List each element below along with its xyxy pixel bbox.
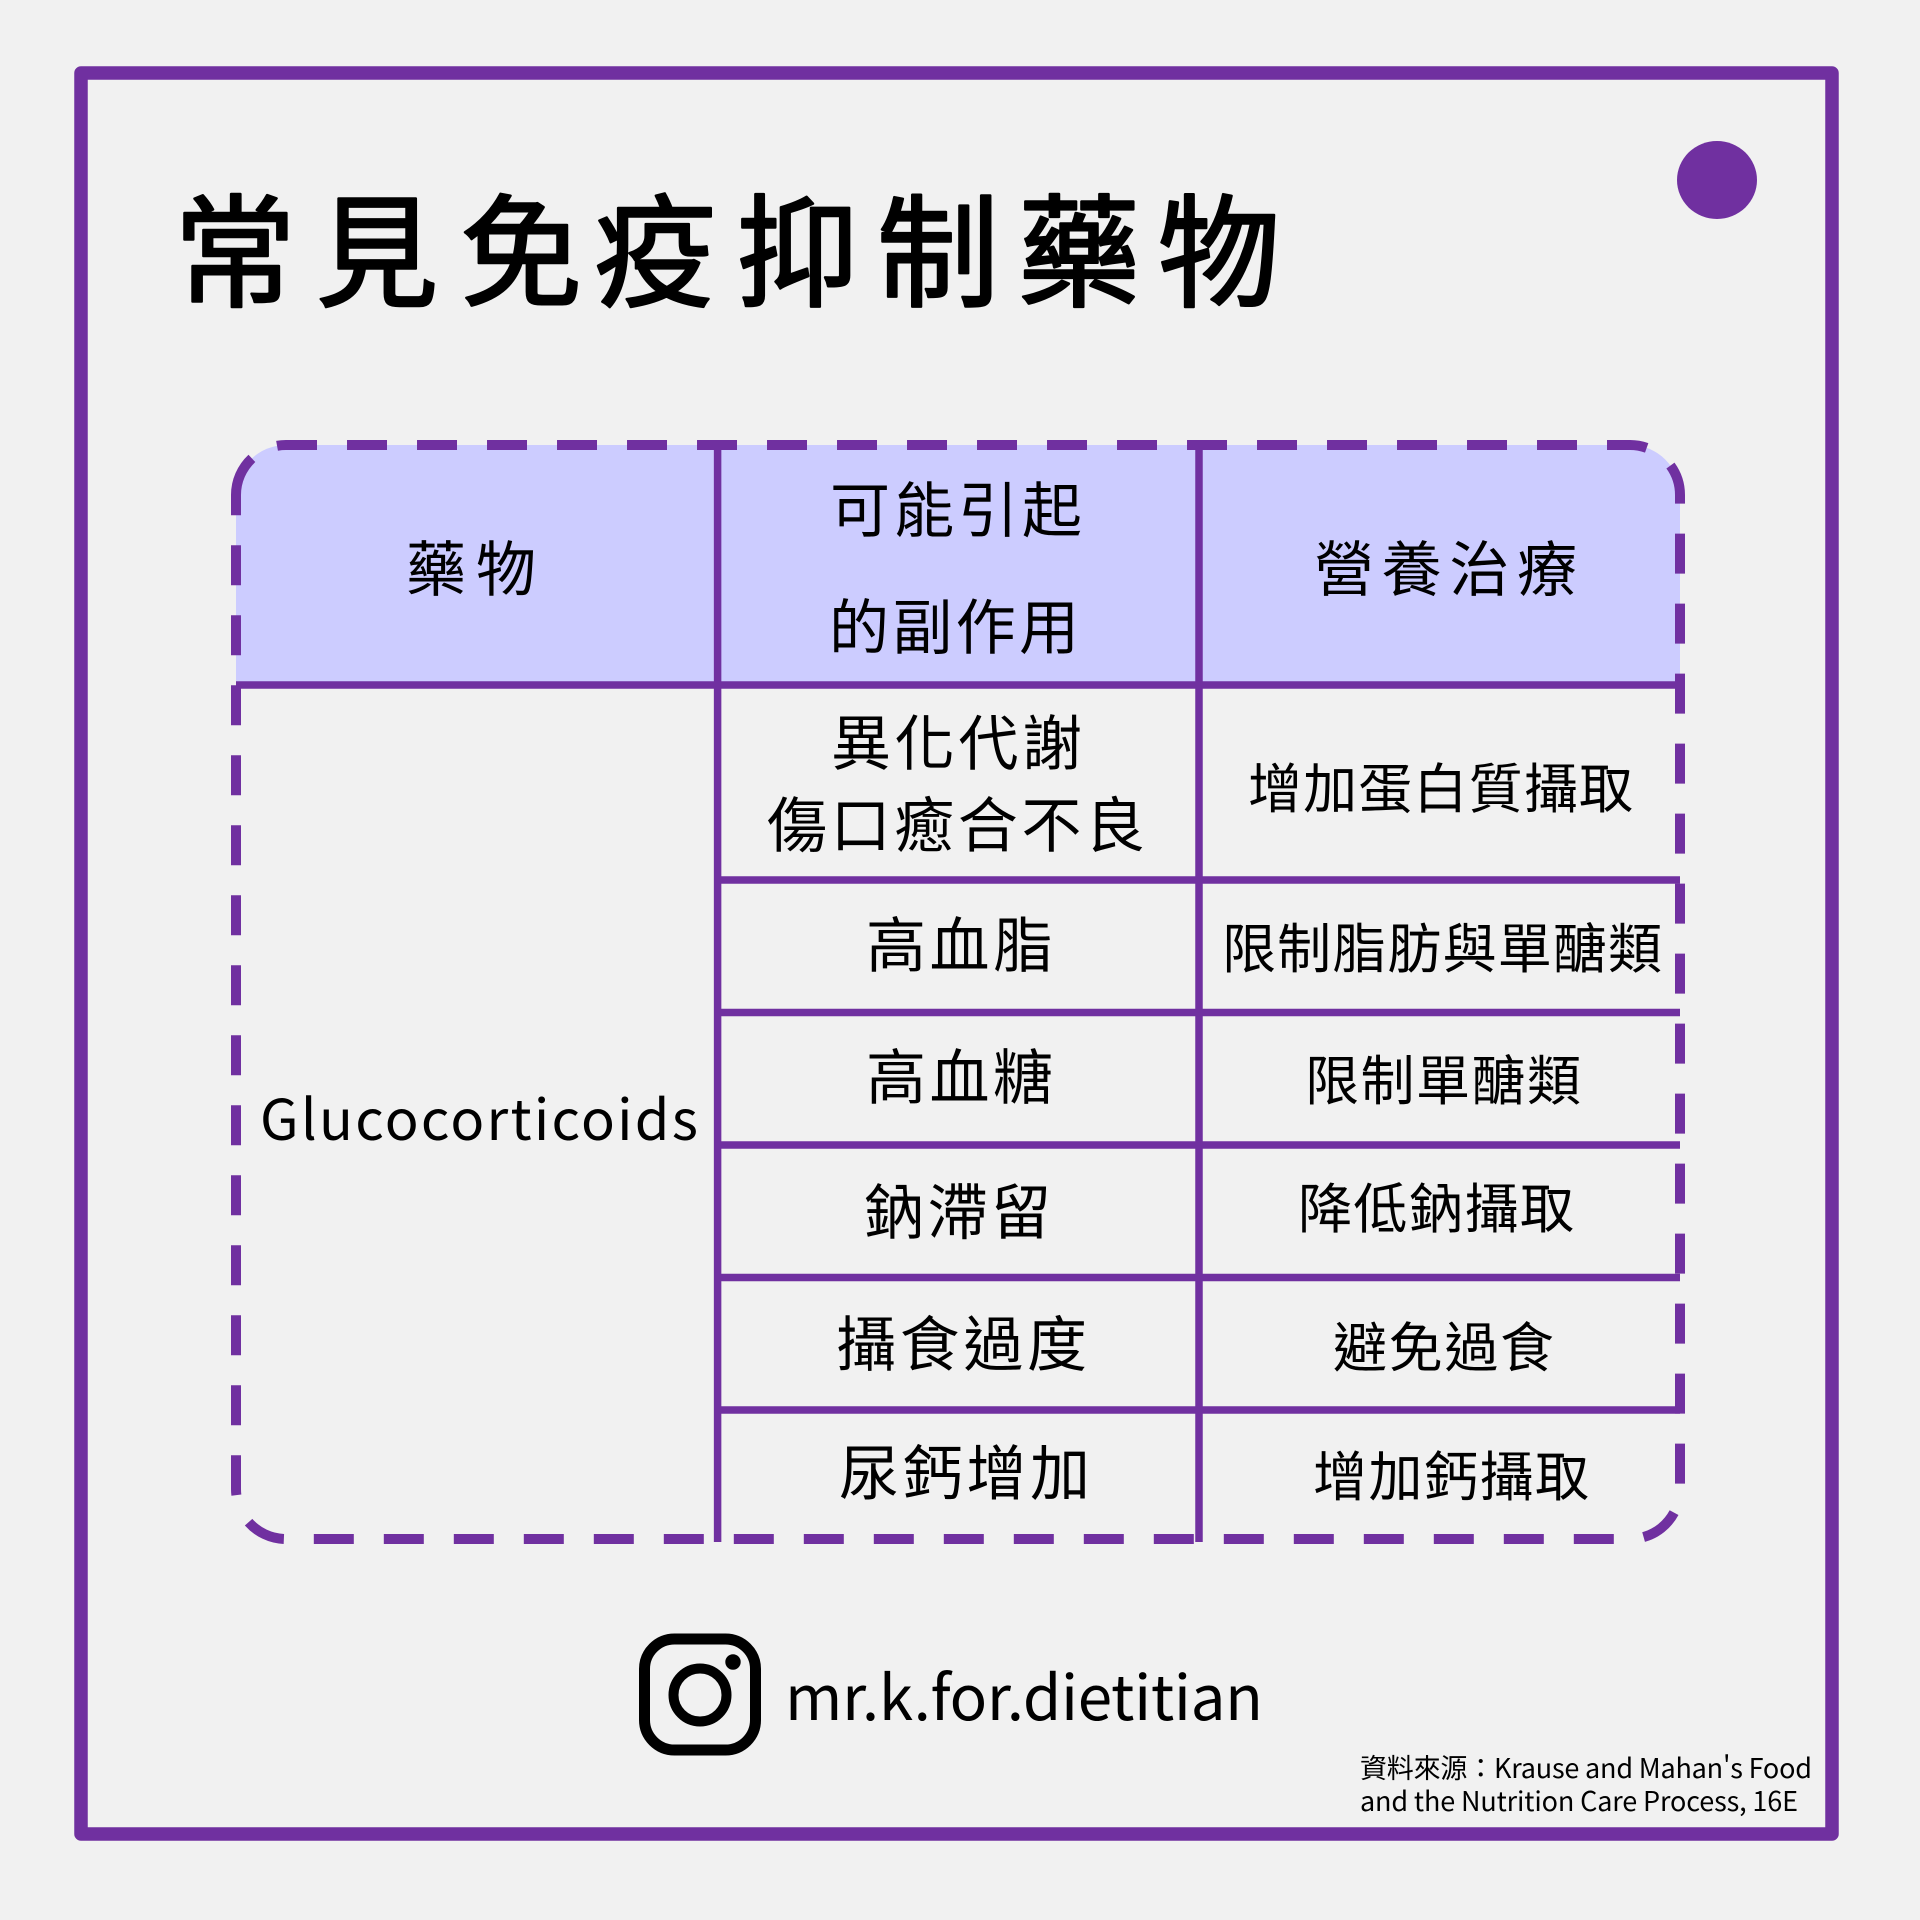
row 5 side effect: 攝食過度 <box>836 1297 1087 1384</box>
table grid lines <box>236 445 1680 1542</box>
row 1 therapy: 增加蛋白質攝取 <box>1248 745 1633 824</box>
row 1 side effects: 傷口癒合不良 <box>767 778 1145 865</box>
panel: side-effects table <box>236 445 1680 1542</box>
header: possible side effects: 的副作用 <box>829 580 1079 667</box>
row 2 therapy: 限制脂肪與單醣類 <box>1222 905 1662 984</box>
instagram handle: mr.k.for.dietitian <box>785 1648 1263 1738</box>
source note: 資料來源：Krause and Mahan's Food <box>1360 1747 1812 1786</box>
title: 常見免疫抑制藥物 <box>174 156 1280 333</box>
row 6 side effect: 尿鈣增加 <box>839 1426 1090 1513</box>
decorative purple dot <box>1677 141 1757 219</box>
dashed table border <box>236 445 1680 1539</box>
drug name: Glucocorticoids: Glucocorticoids <box>260 1076 698 1157</box>
header: nutrition therapy: 營養治療 <box>1314 522 1577 609</box>
row 1 side effects: 異化代謝 <box>831 696 1082 783</box>
row 4 side effect: 鈉滯留 <box>864 1165 1051 1252</box>
row 3 side effect: 高血糖 <box>866 1030 1053 1117</box>
row 2 side effect: 高血脂 <box>866 898 1053 985</box>
table header background <box>236 445 1680 685</box>
icon: instagram <box>644 1639 756 1750</box>
source note: and the Nutrition Care Process, 16E <box>1360 1780 1798 1819</box>
header: drug: 藥物 <box>406 522 536 609</box>
row 5 therapy: 避免過食 <box>1333 1304 1554 1383</box>
row 6 therapy: 增加鈣攝取 <box>1313 1433 1589 1512</box>
source note <box>1360 1747 1812 1819</box>
header: possible side effects: 可能引起 <box>830 463 1082 550</box>
header: possible side effects <box>829 463 1082 667</box>
row 4 therapy: 降低鈉攝取 <box>1298 1165 1574 1244</box>
row 1 side effects <box>767 696 1145 865</box>
row 3 therapy: 限制單醣類 <box>1305 1037 1581 1116</box>
